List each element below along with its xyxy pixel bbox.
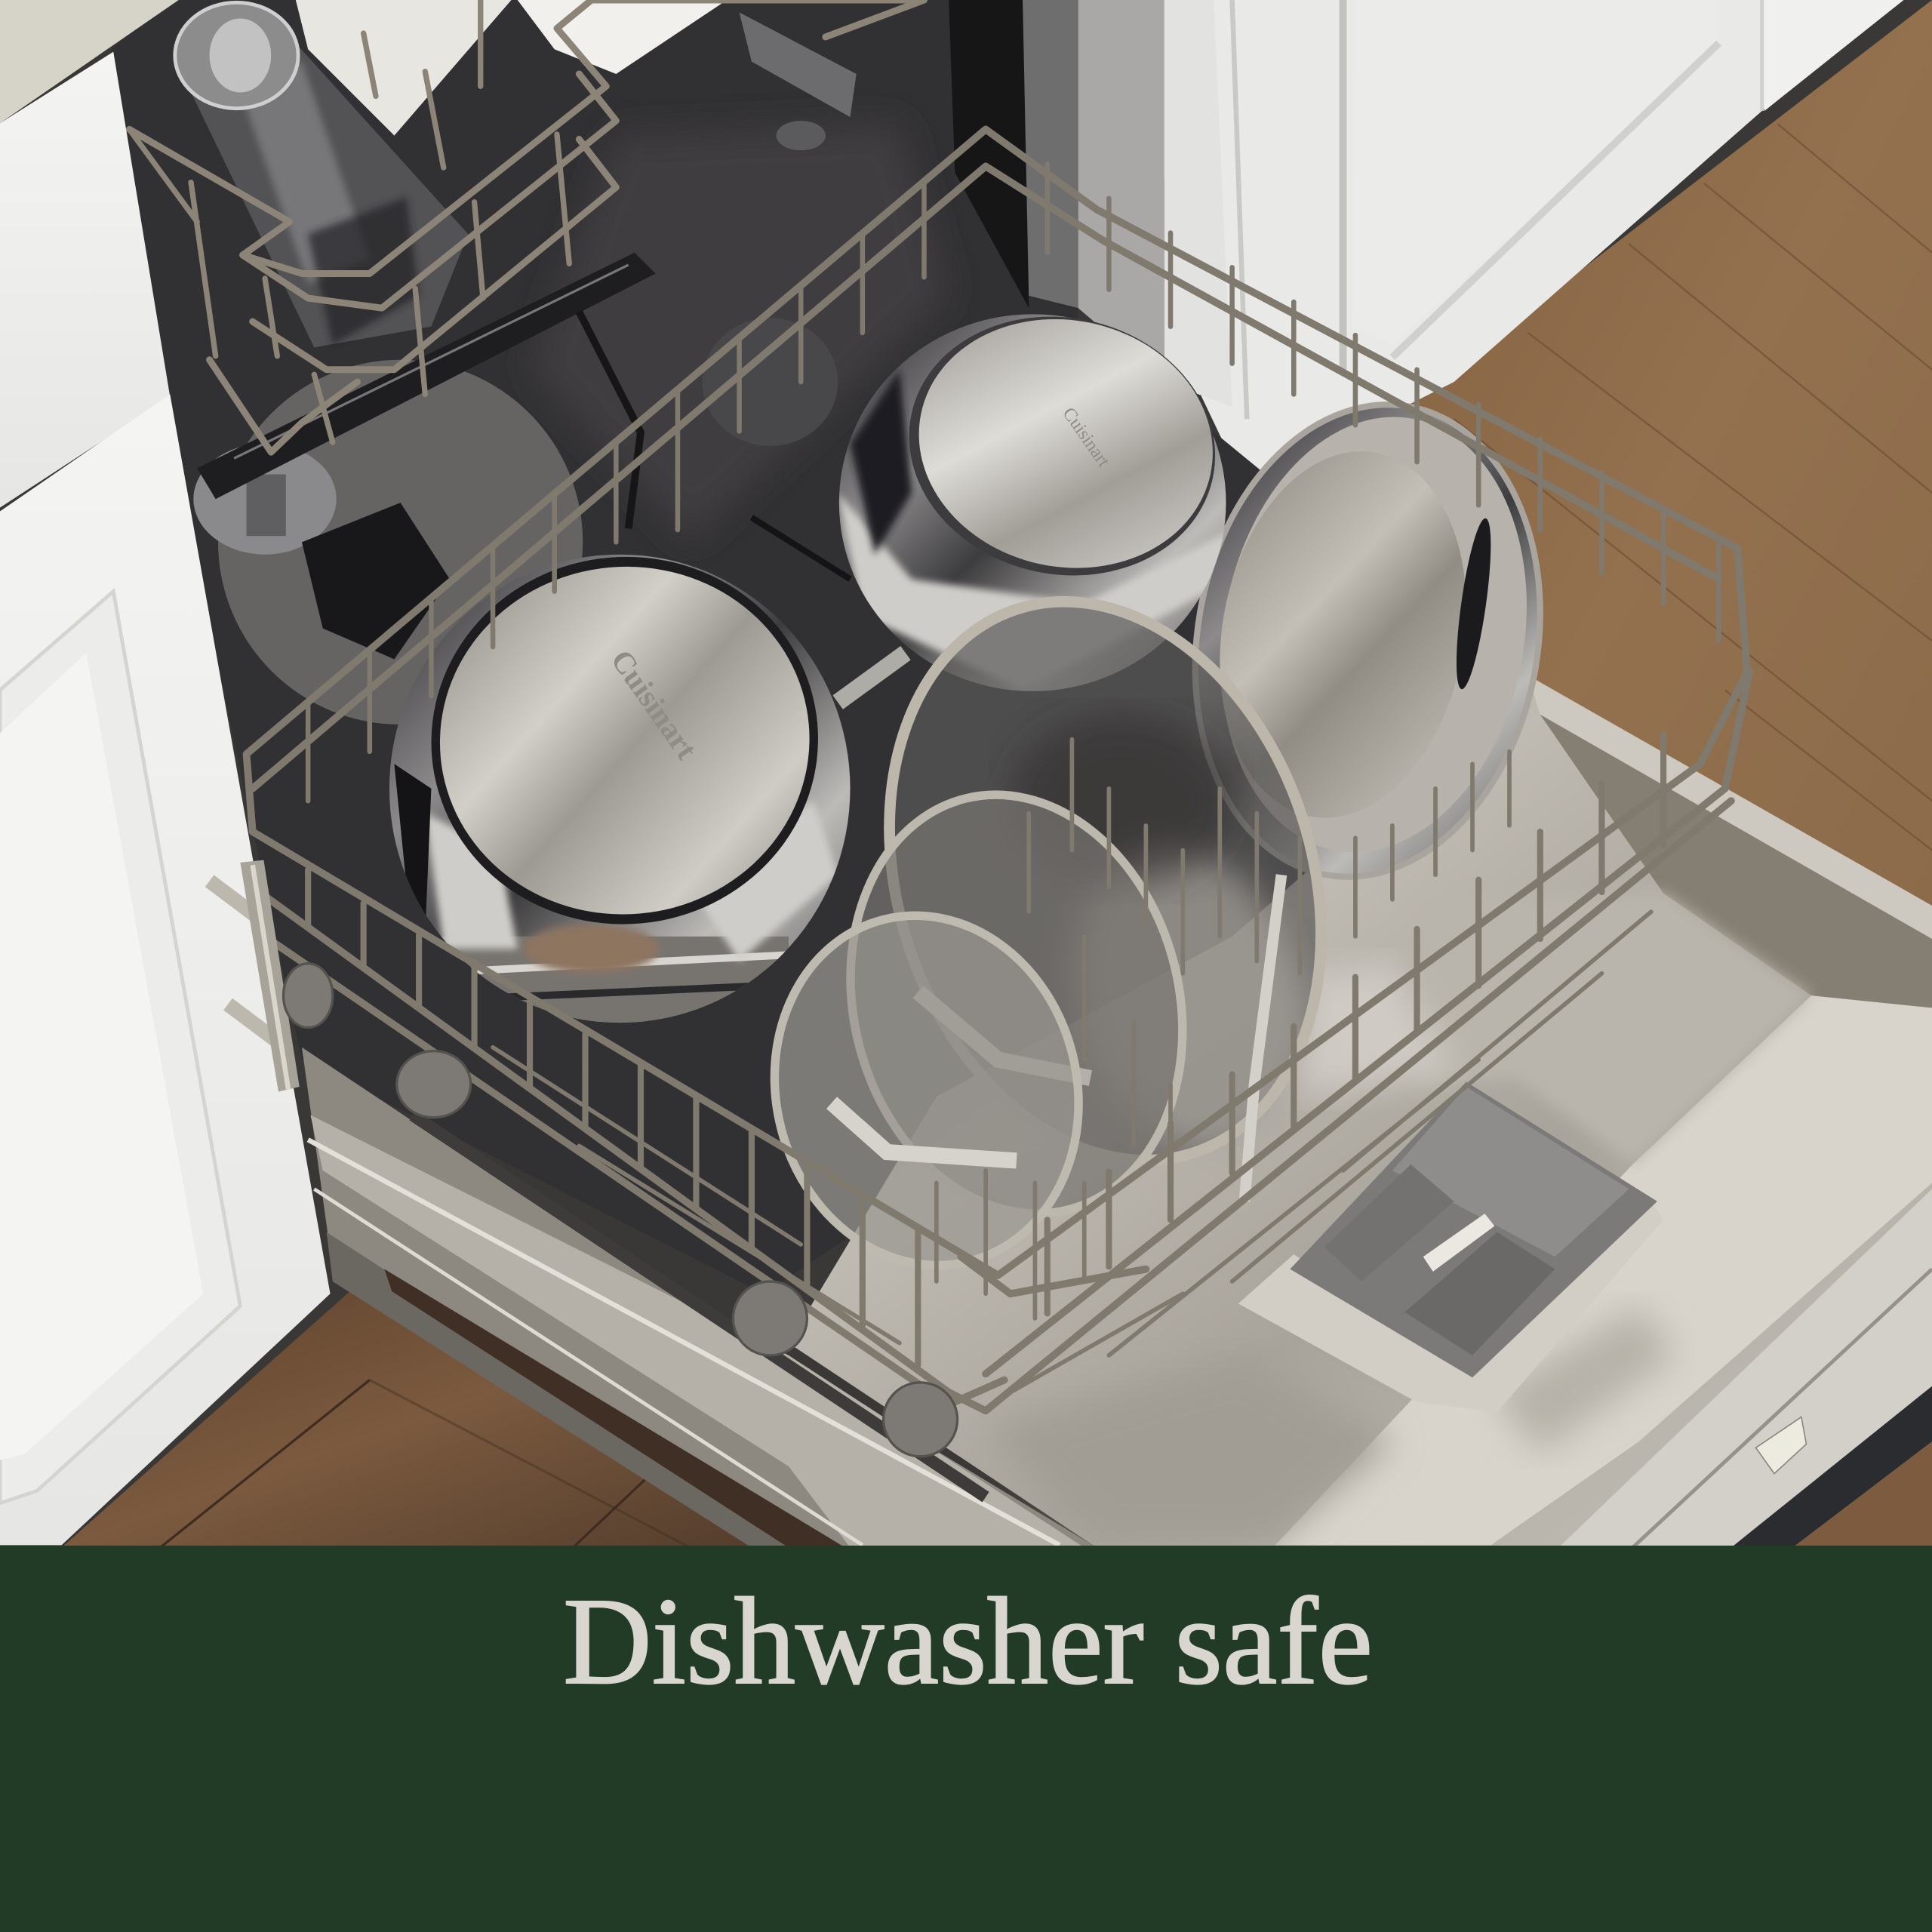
- door: inner stainless steel panel: [789, 680, 1932, 1548]
- interior: lighter back wall: [530, 123, 949, 542]
- back-right tines: [1048, 164, 1719, 641]
- cabinet: left lower white door: [0, 394, 331, 1545]
- rack rails: [247, 129, 1749, 1411]
- door latch: [1756, 1417, 1806, 1474]
- heading: Dishwasher safe: [563, 1572, 1373, 1710]
- frying pan upright at right: [1159, 377, 1577, 904]
- drinking glass: [175, 2, 468, 347]
- door: lit floor panels: [986, 894, 1932, 1545]
- medium glass lid: [808, 759, 1226, 1249]
- interior: filter, sprayer arm and cup: [193, 253, 851, 724]
- lid handle: [1244, 875, 1281, 1201]
- door: right edge trim: [1558, 1189, 1932, 1548]
- cabinet: upper right white doors: [1078, 0, 1903, 487]
- front-right tines: [1048, 734, 1663, 1313]
- back-left tines: [308, 181, 924, 801]
- cabinet: countertop edge: [0, 0, 179, 123]
- large glass lid: [820, 545, 1390, 1217]
- wheel: [397, 1051, 471, 1118]
- door: lower left trim rails: [302, 1048, 1097, 1548]
- wheel: [733, 1281, 807, 1355]
- door: top rim and recess: [1527, 675, 1932, 1008]
- pot handle: [838, 653, 906, 703]
- wheel: [284, 964, 333, 1028]
- wheel: [884, 1383, 958, 1457]
- background: wood floor lower left: [63, 1292, 749, 1546]
- lid handle: [832, 1103, 1017, 1161]
- detergent dispenser: [1238, 1081, 1663, 1412]
- dishwasher interior: dark tub: [111, 0, 1527, 1294]
- door handle bar: [210, 860, 300, 1092]
- lower rack wire frame: [247, 129, 1749, 1411]
- embossed base mark: Cuisinart: [605, 644, 704, 766]
- embossed base mark: Cuisinart: [1058, 404, 1114, 471]
- floor cross wires: [493, 912, 1651, 1392]
- lid handle: [918, 992, 1091, 1078]
- upper rack wires: [129, 0, 924, 452]
- bottom band: [0, 1546, 1932, 1932]
- saucepan upside down at back: [838, 289, 1239, 691]
- cabinet: left upper white door: [0, 52, 170, 508]
- inner tines over lids: [937, 740, 1509, 1318]
- background: wood floor right: [1411, 0, 1932, 906]
- small glass lid: [738, 883, 1115, 1298]
- interior: door seal and fittings: [740, 0, 1078, 308]
- sauce pot upside down at left: [389, 541, 906, 1023]
- dinner plates in upper rack: [296, 0, 727, 136]
- front-left tines: [308, 870, 918, 1365]
- wood corner: [1793, 1441, 1932, 1548]
- rack wheels: [284, 964, 958, 1457]
